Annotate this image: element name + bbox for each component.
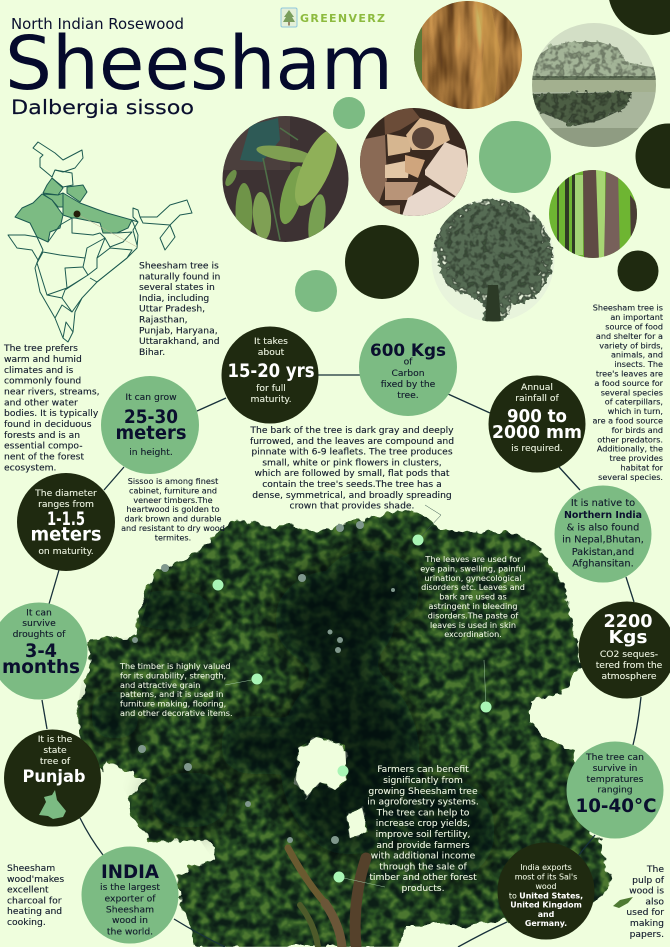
- stat: carbon: tree.: [397, 390, 419, 401]
- text: climate: nent of the forest: [4, 452, 84, 463]
- stat: exports: [498, 842, 594, 940]
- icon: Punjab map: [39, 790, 66, 819]
- text: bark description: furrowed, and the leaves are compound and: [250, 436, 454, 447]
- stat: state tree: [4, 730, 101, 826]
- text: farmers: increase crop yields,: [376, 818, 470, 829]
- text: wildlife: for birds and: [612, 425, 663, 435]
- text: wildlife: Sheesham tree is: [593, 303, 663, 313]
- text: farmers: improve soil fertility,: [376, 829, 471, 840]
- text: paper pulp: The: [646, 864, 664, 875]
- text: timber quality: Sissoo is among finest: [128, 476, 218, 486]
- stat: diameter: [17, 473, 115, 571]
- stat: maturity: maturity.: [251, 394, 291, 405]
- photo: logs: [360, 108, 470, 218]
- stat: state tree: tree of: [40, 756, 71, 767]
- stat: carbon: Carbon: [391, 368, 425, 379]
- text: climate: forests and is an: [4, 430, 80, 441]
- stat: height: [101, 376, 199, 474]
- stat: maturity: for full: [256, 383, 286, 394]
- text: bark description: pinnate with 6-9 leaflets. The tree produces: [251, 447, 453, 458]
- text: bark description: The bark of the tree is dark gray and deeply: [249, 425, 454, 436]
- stat: maturity: It takes: [254, 336, 288, 347]
- text: wildlife: habitat for: [621, 462, 664, 472]
- text: climate: warm and humid: [4, 354, 82, 365]
- subtitle: common name: North Indian Rosewood: [11, 15, 184, 33]
- text: paper pulp: also: [645, 896, 664, 907]
- text: wildlife: other predators.: [597, 434, 663, 444]
- stat: exports: United Kingdom: [510, 900, 582, 910]
- text: paper pulp: used for: [626, 907, 664, 918]
- text: medicinal leaves: bark are used as: [439, 592, 507, 602]
- stat: CO2: tered from the: [596, 660, 663, 671]
- text: farmers: with additional income: [371, 851, 476, 862]
- stat: drought: It can: [26, 608, 52, 618]
- text: timber quality: dark brown and durable: [125, 514, 222, 524]
- text: states: Sheesham tree is: [139, 260, 219, 272]
- text: medicinal leaves: excordination.: [444, 629, 502, 639]
- stat: CO2: 2200: [604, 611, 652, 632]
- stat: exports: and: [538, 910, 554, 919]
- text: timber quality: veneer timbers.The: [133, 495, 213, 505]
- text: states: naturally found in: [139, 271, 221, 282]
- text: charcoal: wood'makes: [7, 874, 64, 885]
- photo: pods: [222, 116, 350, 247]
- stat: native range: Pakistan,and: [572, 547, 634, 558]
- stat: diameter: ranges from: [38, 499, 94, 510]
- text: states: Punjab, Haryana,: [139, 325, 218, 336]
- stat: diameter: on maturity.: [38, 546, 94, 557]
- text: climate: climates and is: [4, 365, 73, 376]
- stat: exporter: the world.: [107, 926, 153, 938]
- tree callout dots: [212, 534, 492, 882]
- stat: drought: droughts of: [13, 629, 66, 640]
- text: charcoal: Sheesham: [7, 863, 55, 874]
- text: wildlife: source of food: [605, 322, 663, 332]
- text: states: several states in: [139, 282, 215, 293]
- stat: exports: Germany.: [525, 919, 567, 928]
- text: timber uses: for its durability, strength,: [120, 670, 226, 680]
- text: climate: The tree prefers: [3, 343, 78, 354]
- stat: CO2: CO2 seques-: [600, 649, 658, 660]
- text: farmers: through the sale of: [379, 861, 467, 872]
- logo: GREENVERZ: [300, 12, 385, 25]
- text: bark description: contain the tree's seeds.The tree has a: [262, 479, 442, 490]
- text: wildlife: of caterpillars,: [605, 397, 663, 407]
- text: bark description: which are followed by small, flat pods that: [254, 468, 450, 479]
- stat: temperature: 10-40°C: [576, 795, 656, 817]
- text: wildlife: a food source for: [594, 378, 664, 388]
- text: wildlife: tree's leaves are: [596, 368, 663, 378]
- stat: CO2: [578, 602, 670, 698]
- text: medicinal leaves: disorders etc. Leaves and: [421, 582, 525, 592]
- text: farmers: and provide farmers: [376, 840, 470, 851]
- stat: exports: wood: [535, 882, 557, 891]
- india map: [8, 142, 192, 342]
- text: medicinal leaves: leaves is used in skin: [430, 620, 516, 630]
- stat: maturity: about: [258, 347, 285, 358]
- text: medicinal leaves: disorders.The paste of: [428, 610, 518, 620]
- text: states: Uttar Pradesh,: [139, 304, 205, 315]
- stat: state tree: It is the: [38, 734, 73, 745]
- photo: forest: [548, 170, 638, 260]
- text: climate: found in deciduous: [4, 419, 92, 430]
- stat: maturity: 15-20 yrs: [228, 360, 314, 382]
- text: climate: essential compo-: [4, 441, 83, 452]
- text: wildlife: Additionally, the: [597, 444, 663, 454]
- stat: rainfall: 2000 mm: [492, 422, 582, 443]
- text: farmers: timber and other forest: [369, 872, 477, 883]
- stat: rainfall: is required.: [511, 443, 563, 454]
- text: timber quality: cabinet, furniture and: [129, 485, 217, 495]
- text: medicinal leaves: The leaves are used for: [424, 554, 521, 564]
- text: wildlife: and shelter for a: [596, 331, 663, 341]
- stat: exporter: is the largest: [100, 882, 160, 893]
- text: states: Bihar.: [139, 347, 165, 358]
- text: farmers: products.: [401, 883, 445, 894]
- stat: diameter: The diameter: [34, 488, 97, 499]
- text: bark description: small, white or pink flowers in clusters,: [262, 457, 442, 468]
- text: climate: commonly found: [4, 376, 81, 387]
- stat: drought: months: [2, 656, 80, 678]
- stat: diameter: 1-1.5: [47, 508, 85, 530]
- text: farmers: The tree can help to: [376, 807, 470, 818]
- stat: temperature: [566, 742, 664, 838]
- text: climate: near rivers, streams,: [4, 386, 100, 397]
- text: timber uses: and other decorative items.: [120, 708, 233, 718]
- stat: rainfall: [488, 376, 586, 472]
- stat: state tree: state: [43, 745, 67, 756]
- text: timber quality: and resistant to dry wood: [121, 523, 225, 533]
- stat: height: 25-30: [124, 406, 178, 428]
- text: charcoal: cooking.: [7, 917, 46, 928]
- text: farmers: growing Sheesham tree: [368, 786, 478, 797]
- stat: exporter: Sheesham: [106, 904, 154, 916]
- stat: height: meters: [116, 422, 186, 444]
- stat: drought: [0, 602, 88, 700]
- stat: temperature: ranging: [597, 784, 633, 796]
- stat: height: in height.: [129, 447, 173, 458]
- text: wildlife: several species.: [598, 472, 663, 482]
- stat: rainfall: Annual: [521, 382, 553, 393]
- stat: exporter: INDIA: [101, 861, 159, 883]
- tree sprig: [613, 897, 633, 908]
- stat: native range: Afghansitan.: [572, 559, 634, 570]
- tree light specks: [132, 521, 395, 844]
- stat: native range: & is also found: [567, 522, 639, 534]
- text: bark description: dense, symmetrical, and broadly spreading: [252, 490, 452, 501]
- stat: CO2: atmosphere: [601, 671, 657, 682]
- text: paper pulp: wood is: [629, 886, 664, 897]
- text: timber uses: furniture making, flooring,: [120, 699, 226, 709]
- text: timber uses: The timber is highly valued: [119, 661, 230, 671]
- text: bark description: crown that provides shade.: [290, 501, 414, 512]
- text: medicinal leaves: urination, gynecological: [424, 573, 522, 583]
- stat: diameter: meters: [30, 524, 102, 546]
- text: wildlife: animals, and: [611, 350, 663, 360]
- stat: exports: India exports: [520, 863, 572, 872]
- text: climate: bodies. It is typically: [4, 408, 99, 419]
- stat: rainfall: 900 to: [507, 406, 567, 427]
- stat: native range: Northern India: [564, 510, 642, 521]
- stat: carbon: of: [404, 356, 413, 368]
- photo: lake: [530, 20, 660, 148]
- text: timber uses: patterns, and it is used in: [120, 689, 223, 699]
- stat: CO2: Kgs: [608, 627, 648, 648]
- stat: rainfall: rainfall of: [515, 393, 560, 404]
- text: farmers: in agroforestry systems.: [367, 797, 479, 808]
- main title: Sheesham: [5, 21, 393, 107]
- text: wildlife: variety of birds,: [599, 340, 663, 350]
- logo: [281, 8, 385, 27]
- stat: native range: in Nepal,Bhutan,: [562, 535, 644, 546]
- text: climate: ecosystem.: [4, 462, 56, 473]
- stat: height: It can grow: [125, 392, 177, 403]
- text: paper pulp: making: [630, 918, 664, 929]
- photo: bark: [414, 0, 522, 110]
- text: wildlife: insects. The: [614, 359, 663, 369]
- stat: temperature: The tree can: [585, 752, 644, 763]
- stat: maturity: [222, 326, 318, 424]
- text: charcoal: heating and: [7, 906, 62, 917]
- stat: exporter: [82, 846, 178, 944]
- text: paper pulp: pulp of: [632, 875, 665, 886]
- text: timber quality: heartwood is golden to: [126, 504, 220, 514]
- stat: temperature: tempratures: [587, 774, 644, 785]
- text: farmers: Farmers can benefit: [377, 764, 469, 775]
- text: states: Rajasthan,: [139, 314, 188, 326]
- text: wildlife: an important: [610, 312, 663, 322]
- stat: state tree: Punjab: [22, 767, 86, 787]
- text: timber quality: termites.: [155, 532, 191, 542]
- callout leader lines: [225, 505, 486, 887]
- stat: native range: [554, 486, 652, 582]
- stat: carbon: [359, 318, 457, 416]
- text: wildlife: tree provides: [610, 453, 663, 463]
- stat: exporter: exporter of: [105, 894, 156, 904]
- stat: exporter: wood in: [112, 915, 148, 926]
- text: timber uses: and attractive grain: [120, 680, 200, 690]
- title block: [5, 15, 393, 119]
- text: charcoal: charcoal for: [7, 895, 62, 906]
- connector lines: [42, 375, 641, 947]
- text: wildlife: several species: [601, 387, 663, 397]
- tree illustration: [78, 510, 633, 947]
- stat: drought: survive: [22, 618, 56, 629]
- text: medicinal leaves: astringent in bleeding: [428, 601, 518, 611]
- trunk: [288, 848, 366, 947]
- stat: exports: most of its Sal's: [515, 872, 577, 882]
- text: wildlife: are a food source: [592, 416, 663, 426]
- text: states: Uttarakhand, and: [139, 336, 220, 347]
- stat: carbon: 600 Kgs: [370, 341, 446, 361]
- photo: tree: [430, 196, 556, 324]
- text: medicinal leaves: eye pain, swelling, painful: [420, 563, 526, 573]
- stat: temperature: survive in: [593, 763, 638, 774]
- stat: exports: to United States,: [509, 892, 583, 900]
- stat: native range: It is native to: [571, 498, 635, 509]
- text: wildlife: which in turn,: [608, 406, 663, 416]
- text: farmers: significantly from: [383, 775, 463, 786]
- text: paper pulp: papers.: [630, 929, 664, 940]
- stat: carbon: fixed by the: [381, 379, 436, 390]
- decorative solid circles: [295, 0, 670, 312]
- stat: drought: 3-4: [25, 640, 57, 662]
- text: climate: and other water: [4, 397, 78, 408]
- scientific name: Dalbergia sissoo: [11, 96, 194, 119]
- text: charcoal: excellent: [7, 885, 49, 896]
- text: states: India, including: [139, 293, 209, 304]
